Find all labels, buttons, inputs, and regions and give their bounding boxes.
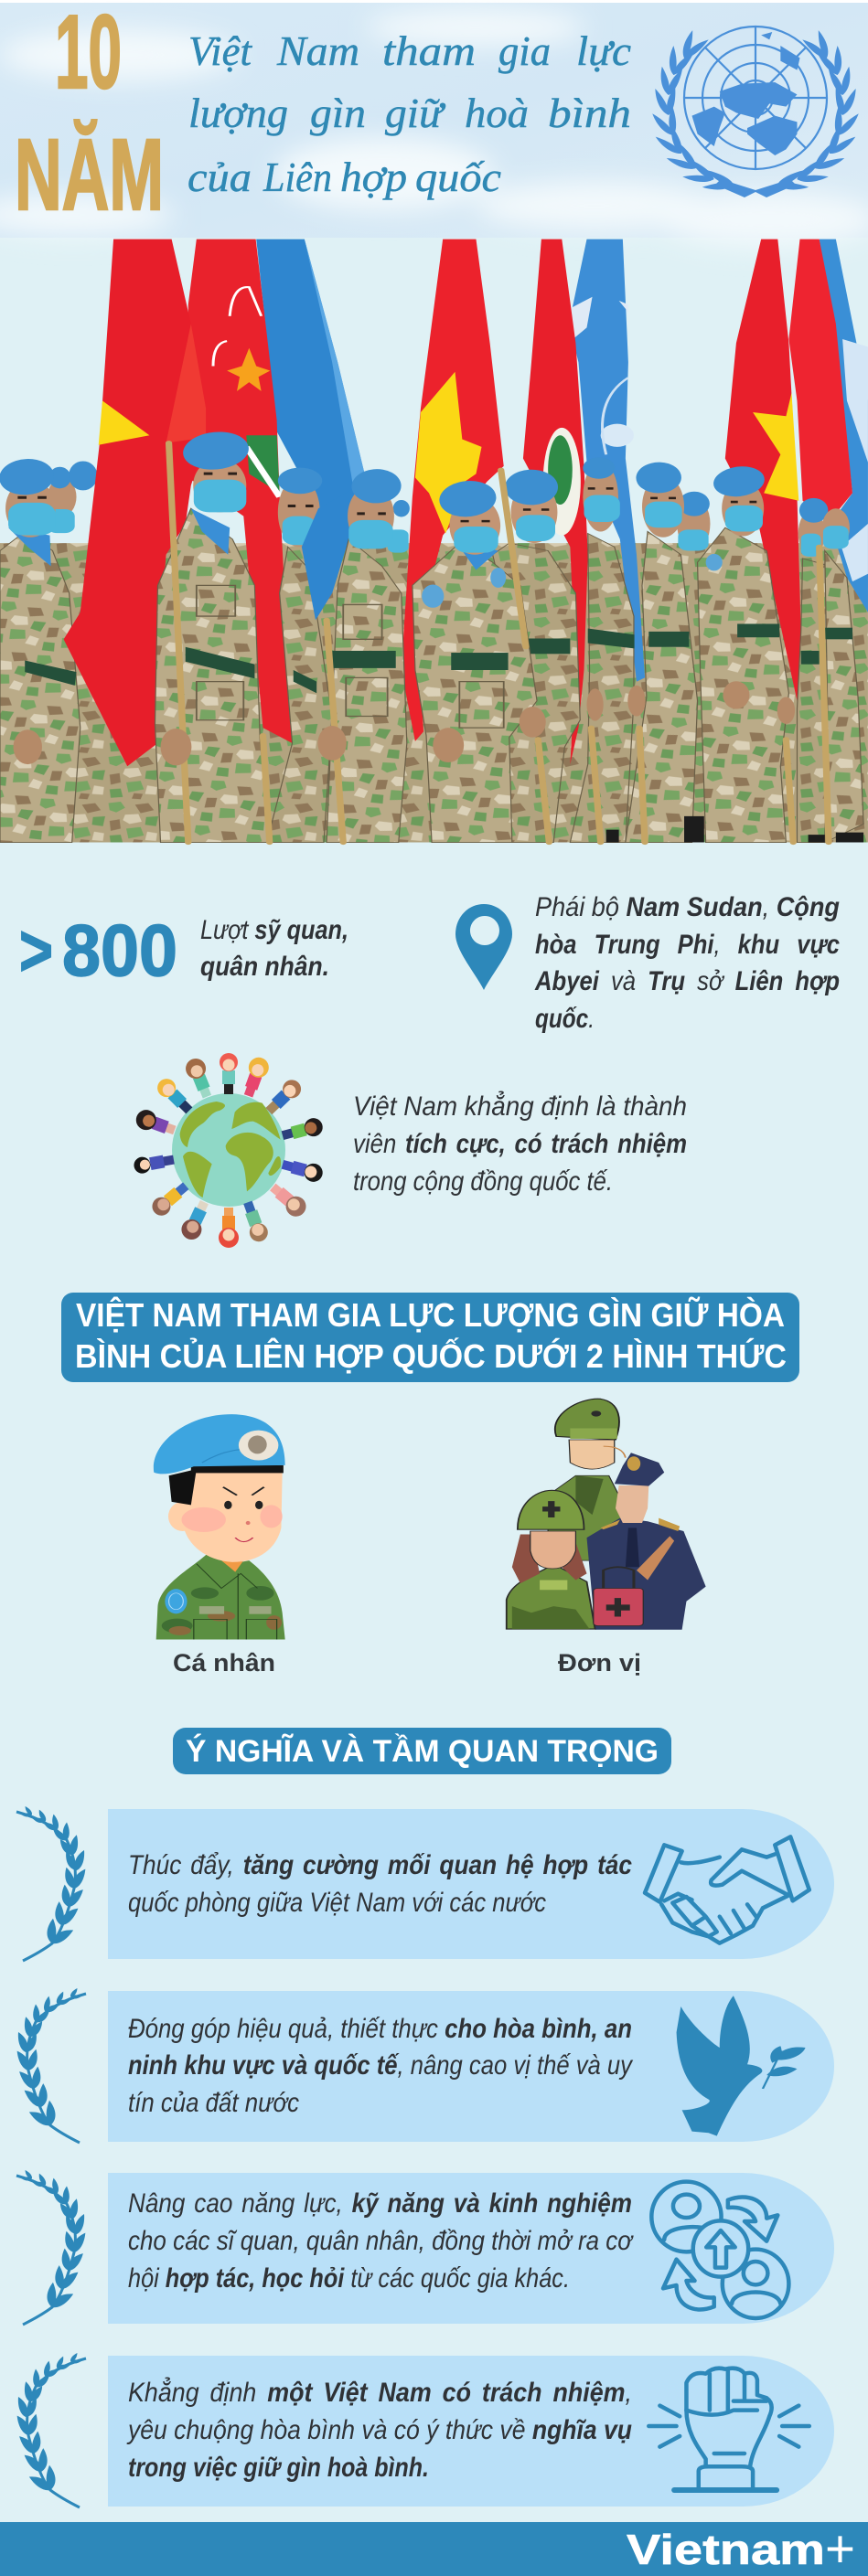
soldier 2 [155, 427, 272, 843]
heading: two forms of participation [61, 1293, 799, 1382]
title text: hoà [465, 90, 529, 136]
stat: more than 800 officers: > [19, 910, 53, 991]
footer with Vietnam+ logo [0, 2519, 868, 2576]
hands [14, 681, 795, 765]
title text: Nam [276, 27, 359, 74]
rear rank heads [47, 461, 850, 557]
title text: quốc [415, 154, 501, 200]
first-aid bag [604, 1567, 634, 1590]
icon: individual peacekeeper [154, 1414, 285, 1640]
stat: more than 800 officers [19, 910, 348, 991]
officer [587, 1518, 706, 1630]
soldier 5 [413, 475, 537, 843]
laurel branch [16, 2169, 88, 2325]
heading: two forms of participation: VIỆT NAM THAM GIA LỰC LƯỢNG GÌN GIỮ HÒA [76, 1295, 785, 1334]
boots [606, 816, 863, 843]
big title: 10 năm: NĂM [15, 119, 164, 231]
title text: Liên [263, 154, 332, 200]
title text [188, 27, 631, 200]
laurel branch [16, 1805, 88, 1961]
laurel branch [15, 1987, 86, 2143]
panel: card 2 contributing to peace [15, 1987, 834, 2143]
title text: hợp [340, 154, 407, 200]
card text [128, 2188, 634, 2294]
soldier 6 [493, 468, 580, 843]
globe [172, 1093, 285, 1207]
title text: gia [498, 27, 551, 74]
title text: lực [576, 27, 631, 74]
text: responsible member: trong cộng đồng quốc tế. [353, 1166, 613, 1197]
icon: United Nations emblem [649, 27, 862, 197]
card text: quốc phòng giữa Việt Nam với các nước [128, 1888, 546, 1918]
title text: giữ [385, 90, 446, 136]
stat: more than 800 officers: Lượt sỹ quan, [200, 915, 348, 945]
icon: location pin [455, 904, 512, 990]
icon: children around the globe [133, 1053, 325, 1248]
rear rank uniforms [0, 543, 868, 843]
text: responsible member [353, 1091, 687, 1197]
title text: tham [382, 27, 476, 74]
card text: yêu chuộng hòa bình và có ý thức về nghĩa vụ [126, 2415, 632, 2445]
title text: của [188, 154, 252, 200]
card text: Khẳng định một Việt Nam có trách nhiệm, [128, 2377, 632, 2408]
flags behind the soldiers [188, 240, 868, 764]
label: individual: Cá nhân [173, 1649, 275, 1677]
title text: Việt [188, 27, 252, 74]
card text [128, 1850, 632, 1918]
soldier 8 [626, 458, 698, 843]
card text: Đóng góp hiệu quả, thiết thực cho hòa bình, an [128, 2014, 632, 2044]
card text: Thúc đẩy, tăng cường mối quan hệ hợp tác [128, 1850, 632, 1880]
back soldier [548, 1475, 626, 1560]
laurel branch [15, 2352, 86, 2507]
card text: ninh khu vực và quốc tế, nâng cao vị thế và uy [128, 2050, 634, 2081]
panel: card 3 building capacity [16, 2169, 834, 2325]
card text [126, 2377, 632, 2483]
soldier 4 [327, 463, 410, 843]
heading: meaning and importance: Ý NGHĨA VÀ TẦM QUAN TRỌNG [186, 1734, 659, 1769]
text: missions: Abyei và Trụ sở Liên hợp [534, 966, 840, 996]
flag poles [169, 443, 829, 843]
soldier 9 [698, 462, 788, 843]
card text: trong việc giữ gìn hoà bình. [128, 2453, 429, 2483]
title text: gìn [310, 90, 366, 136]
card text: tín của đất nước [128, 2088, 299, 2118]
card text: Nâng cao năng lực, kỹ năng và kinh nghiệm [128, 2188, 632, 2219]
title text: bình [548, 90, 631, 136]
text: missions: Phái bộ Nam Sudan, Cộng [535, 892, 840, 922]
icon: unit of peacekeepers [507, 1399, 706, 1630]
header banner [0, 0, 868, 247]
panel: card 4 responsible Vietnam [15, 2352, 834, 2507]
soldier 10 and 11 [797, 551, 863, 843]
text: missions [534, 892, 840, 1034]
flag: blue lower section [302, 482, 367, 620]
medic [507, 1567, 595, 1629]
text: responsible member: Việt Nam khẳng định là thành [353, 1091, 687, 1122]
icon: people exchange [651, 2182, 788, 2318]
photo: peacekeepers with flags [0, 240, 868, 843]
icon: raised fist [648, 2368, 809, 2490]
soldier 3 [267, 468, 332, 843]
card text: cho các sĩ quan, quân nhân, đồng thời mở ra cơ [128, 2226, 634, 2256]
children [220, 1053, 238, 1094]
flag: Vietnam foreground left [64, 240, 206, 766]
heading: two forms of participation: BÌNH CỦA LIÊN HỢP QUỐC DƯỚI 2 HÌNH THỨC [75, 1336, 787, 1375]
card text: hội hợp tác, học hỏi từ các quốc gia khác. [128, 2263, 570, 2294]
footer with Vietnam+ logo: Vietnam [627, 2526, 825, 2573]
card text [128, 2014, 634, 2118]
soldier 1 [0, 452, 80, 843]
stat: more than 800 officers: 800 [62, 910, 177, 991]
text: responsible member: viên tích cực, có trách nhiệm [353, 1129, 687, 1159]
title text: lượng [188, 90, 288, 136]
stat: more than 800 officers: quân nhân. [200, 952, 329, 982]
icon: handshake [645, 1836, 809, 1943]
panel: card 1 strengthening defence ties [16, 1805, 834, 1961]
label: unit: Đơn vị [558, 1649, 641, 1677]
icon: dove with olive branch [677, 1996, 806, 2136]
text: missions: hòa Trung Phi, khu vực [535, 930, 840, 960]
soldier 7 [570, 457, 635, 843]
text: missions: quốc. [535, 1004, 595, 1034]
big title: 10 năm [15, 0, 164, 231]
